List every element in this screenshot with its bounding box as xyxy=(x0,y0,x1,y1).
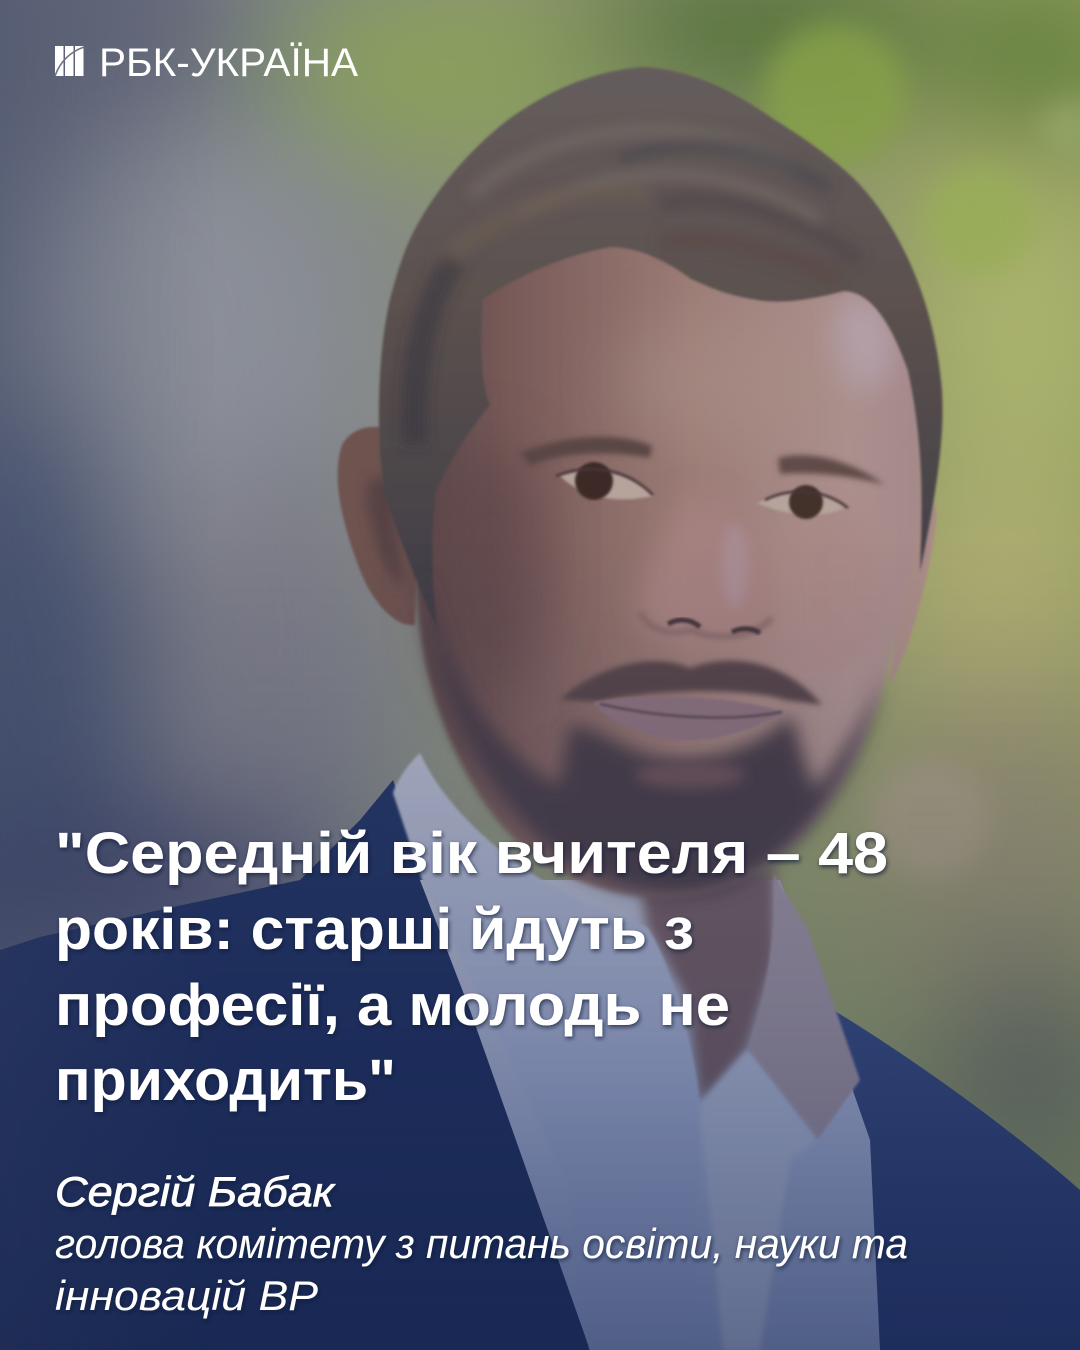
hair strands xyxy=(414,130,860,445)
author role: інновацій ВР xyxy=(55,1272,318,1319)
author role xyxy=(55,1220,908,1319)
logo wordmark: РБК-УКРАЇНА xyxy=(99,41,358,85)
left ear xyxy=(338,427,420,625)
headline quote: професії, а молодь не xyxy=(55,973,730,1038)
headline quote xyxy=(55,821,888,1113)
headline quote: років: старші йдуть з xyxy=(55,897,694,962)
headline quote: приходить" xyxy=(55,1048,396,1113)
eyebrow left xyxy=(520,437,652,466)
face xyxy=(412,200,925,897)
author role: голова комітету з питань освіти, науки та xyxy=(55,1220,908,1267)
collar left xyxy=(393,753,700,1350)
moustache xyxy=(560,660,822,705)
eye left xyxy=(560,471,653,499)
left cheek shadow xyxy=(435,440,545,700)
author name: Сергій Бабак xyxy=(55,1168,336,1215)
logo: РБК-Україна xyxy=(55,41,358,85)
shirt body xyxy=(420,880,880,1350)
forehead glow xyxy=(620,310,860,450)
jacket left xyxy=(0,780,590,1350)
nose xyxy=(640,496,775,641)
temple highlight xyxy=(832,299,892,391)
collar right xyxy=(747,873,860,1140)
eyebrow right xyxy=(778,455,885,485)
author attribution xyxy=(55,1168,908,1319)
beard xyxy=(425,570,885,896)
right ear xyxy=(890,492,937,685)
shirt placket fold xyxy=(700,1050,817,1350)
jacket right xyxy=(825,1005,1080,1350)
eye right xyxy=(757,493,845,515)
hair xyxy=(379,67,943,632)
headline quote: "Середній вік вчителя – 48 xyxy=(55,821,888,886)
right cheek highlight xyxy=(775,505,885,675)
icon: logo mark xyxy=(55,46,84,76)
chin patch xyxy=(635,761,745,789)
lips xyxy=(593,697,783,740)
neck xyxy=(640,870,775,1105)
